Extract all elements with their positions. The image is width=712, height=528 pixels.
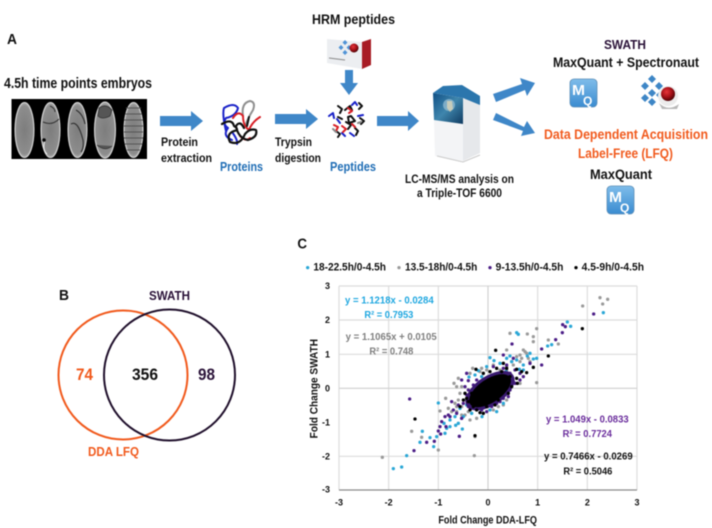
icon: peptide fragments: [329, 102, 364, 137]
subheading: MaxQuant: MaxQuant: [590, 166, 652, 182]
equation: 9-13.5h: y = 1.049x - 0.0833: [546, 414, 629, 425]
panel B: Venn diagram: [58, 287, 235, 459]
y axis tick labels: 2: [325, 315, 330, 325]
panel label A: A: [7, 31, 17, 48]
icon: proteins tangle: [222, 101, 260, 144]
icon: mass spectrometer: [433, 85, 480, 162]
scatter points: [382, 298, 608, 469]
label: trypsin digestion: digestion: [275, 151, 321, 165]
label: trypsin digestion: [275, 135, 321, 165]
label: LC-MS/MS instrument: [405, 174, 514, 200]
y axis tick labels: 0: [325, 383, 330, 393]
x axis tick labels: -2: [385, 497, 393, 507]
x axis tick labels: 3: [634, 497, 639, 507]
x axis tick labels: 1: [535, 497, 540, 507]
label: proteins: Proteins: [220, 160, 263, 174]
y axis tick labels: [322, 281, 330, 495]
arrow: to mass spectrometer: [377, 111, 419, 131]
heading: HRM peptides: HRM peptides: [312, 12, 395, 27]
gray series: [382, 298, 608, 457]
y axis tick labels: -2: [322, 451, 330, 461]
label: SWATH set: SWATH: [149, 289, 190, 303]
icon: Spectronaut: [641, 75, 679, 109]
y axis tick labels: -1: [322, 417, 330, 427]
label: LC-MS/MS instrument: a Triple-TOF 6600: [417, 188, 502, 200]
equation: 13.5-18h: [346, 332, 437, 357]
count: DDA only: 74: [76, 366, 94, 384]
panel label B: B: [59, 287, 69, 304]
purple series: [410, 314, 594, 451]
label: protein extraction: [161, 135, 212, 165]
x axis tick labels: -3: [335, 497, 343, 507]
icon: MaxQuant second: Q: [620, 201, 629, 215]
label: DDA LFQ set: DDA LFQ: [88, 445, 139, 459]
label: protein extraction: extraction: [161, 151, 212, 165]
panel C: scatter plot: [297, 236, 644, 526]
arrow: protein extraction: [160, 111, 203, 131]
label: trypsin digestion: Trypsin: [275, 135, 312, 149]
icon: MaxQuant: [570, 79, 597, 108]
label: protein extraction: Protein: [161, 135, 198, 149]
legend: 9-13.5h/0-4.5h: [496, 262, 564, 274]
plot gridlines and axes: [339, 286, 637, 490]
equation: 9-13.5h: [546, 414, 629, 440]
circle: DDA LFQ: [58, 310, 188, 440]
heading: embryos: 4.5h time points embryos: [4, 75, 152, 92]
arrow: trypsin digestion: [275, 109, 318, 129]
x axis title: Fold Change DDA-LFQ: [438, 514, 537, 526]
heading: SWATH: SWATH: [604, 37, 646, 52]
arrow: to SWATH: [493, 78, 535, 102]
count: shared: 356: [132, 366, 158, 384]
subheading: Label-Free: Label-Free (LFQ): [578, 145, 673, 161]
panel A: workflow: [4, 12, 708, 215]
y axis tick labels: -3: [322, 485, 330, 495]
icon: HRM kit box: [327, 39, 371, 69]
x axis tick labels: -1: [434, 497, 442, 507]
icon: MaxQuant: Q: [583, 94, 592, 108]
panel label C: C: [297, 236, 307, 252]
equation: 13.5-18h: y = 1.1065x + 0.0105: [346, 332, 437, 343]
legend: 18-22.5h/0-4.5h: [313, 262, 386, 274]
icon: MaxQuant: M: [572, 82, 585, 99]
dense core of points: [459, 363, 521, 418]
equation: 9-13.5h: R² = 0.7724: [563, 429, 612, 440]
equation: 18-22.5h: [345, 295, 434, 321]
equation: 4.5-9h: R² = 0.5046: [563, 466, 613, 477]
equation: 4.5-9h: [544, 452, 633, 477]
label: LC-MS/MS instrument: LC-MS/MS analysis on: [405, 174, 514, 186]
x axis tick labels: [335, 497, 639, 507]
equation: 13.5-18h: R² = 0.748: [369, 346, 414, 357]
label: peptides: Peptides: [330, 160, 376, 174]
black series: [415, 329, 582, 436]
equation: 18-22.5h: y = 1.1218x - 0.0284: [345, 295, 434, 306]
legend: 4.5-9h/0-4.5h: [582, 262, 644, 274]
count: SWATH only: 98: [198, 366, 215, 384]
y axis tick labels: 1: [325, 349, 330, 359]
x axis tick labels: 0: [485, 497, 490, 507]
legend: [306, 262, 644, 274]
equation: 18-22.5h: R² = 0.7953: [364, 310, 414, 321]
x axis tick labels: 2: [585, 497, 590, 507]
y axis title: Fold Change SWATH: [308, 339, 320, 438]
embryo micrograph: [12, 99, 147, 159]
arrow: to DDA: [493, 113, 535, 136]
legend: 13.5-18h/0-4.5h: [405, 262, 478, 274]
cyan series: [393, 313, 603, 469]
circle: SWATH: [104, 310, 235, 440]
icon: MaxQuant second: [607, 186, 634, 215]
equation: 4.5-9h: y = 0.7466x - 0.0269: [544, 452, 633, 463]
arrow: HRM to peptides: [340, 70, 358, 95]
y axis tick labels: 3: [325, 281, 330, 291]
icon: MaxQuant second: M: [609, 189, 622, 206]
